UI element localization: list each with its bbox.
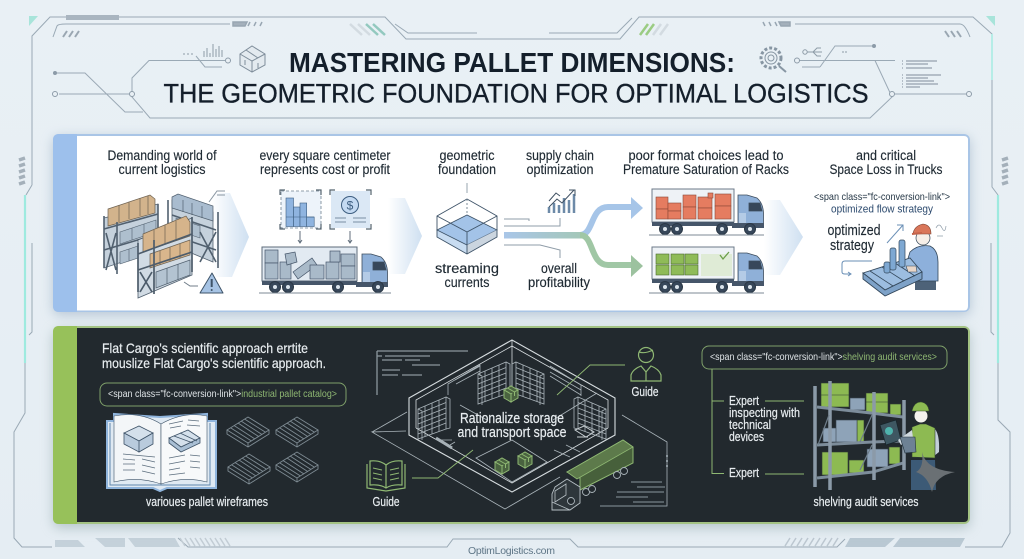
text: and critical space loss: Space Loss in Trucks: [830, 162, 943, 177]
text: expert: Expert: [729, 465, 759, 480]
link pill: catalog: <span class="fc-conversion-link">industrial pallet catalog>: [108, 388, 337, 400]
icon: nodes: [803, 48, 846, 56]
text: supply chain optimization: [526, 148, 594, 177]
text: expert inspecting: inspecting with: [729, 405, 800, 420]
icon: worker with pallet: [842, 224, 946, 296]
icon: rising trend chart: [549, 190, 575, 213]
text: rationalize storage: and transport space: [458, 425, 566, 441]
icon: truck with disordered cargo: [259, 247, 391, 293]
caption: pallet wireframes: varioues pallet wireframes: [146, 494, 268, 509]
icon: gear and magnifier: [761, 48, 786, 72]
icon: small bar chart: [183, 44, 222, 57]
text: rationalize storage: [458, 411, 566, 441]
text: conversion link: optimized flow strategy: [831, 204, 933, 216]
footer: site name: OptimLogistics.com: [468, 545, 555, 557]
text: poor format choices: poor format choices lead to: [628, 148, 784, 163]
icon: wire truck: [552, 440, 633, 510]
icon: text list: [902, 61, 941, 87]
text: expert inspecting: [729, 393, 800, 444]
sparkle watermark: [916, 452, 955, 492]
arrows to truck: [298, 231, 352, 243]
icon: parcel box: [240, 46, 265, 72]
text: optimized strategy: strategy: [830, 237, 874, 254]
text: streaming currents: currents: [444, 275, 490, 290]
text: supply chain optimization: optimization: [526, 162, 594, 177]
icon: pallet wireframes: [227, 417, 318, 484]
tree connector: [712, 369, 804, 474]
label: guide bottom: Guide: [372, 494, 400, 509]
text: poor format choices: [623, 148, 789, 177]
text: optimized strategy: optimized: [828, 222, 880, 239]
chevron arrow 1: [212, 193, 249, 277]
icon: dollar sheet: [330, 190, 371, 229]
title: [164, 47, 868, 108]
link pill: catalog: [100, 383, 346, 406]
icon: dashed bar chart: [280, 190, 321, 229]
text: expert inspecting: technical: [729, 417, 771, 432]
flow lines splitting to trucks: [504, 197, 643, 277]
icon: guide book: [367, 450, 473, 491]
text: rationalize storage: Rationalize storage: [460, 411, 564, 427]
text: conversion link: [814, 191, 950, 216]
icon: truck with green cargo: [649, 247, 764, 293]
title: MASTERING PALLET DIMENSIONS:: [289, 47, 735, 78]
text: conversion link: <span class="fc-conversion-link">: [814, 191, 950, 203]
text: demanding world: [108, 148, 217, 177]
icon: dollar sheet: $: [347, 198, 354, 212]
icon: shelving unit: [815, 381, 904, 490]
text: demanding world: current logistics: [118, 162, 206, 177]
panel: logistics challenge: [53, 134, 970, 315]
text: overall profitability: overall: [541, 261, 577, 276]
text: poor format choices: Premature Saturation of Racks: [623, 162, 789, 177]
icon: geometric cube with water: [437, 183, 497, 254]
text: geometric foundation: foundation: [438, 162, 496, 177]
chevron arrow 3: [764, 200, 803, 275]
icon: warning triangle: [200, 273, 223, 293]
title frame with circuit traces: [52, 44, 972, 118]
text: optimized strategy: [828, 222, 880, 254]
text: expert inspecting: devices: [729, 429, 764, 444]
text: overall profitability: [528, 261, 590, 290]
text: expert inspecting: Expert: [729, 393, 759, 408]
caption: shelving audit services: shelving audit services: [814, 494, 919, 509]
technical notes right: [600, 455, 667, 506]
icon: truck with red cargo: [649, 189, 764, 235]
label: guide top: Guide: [632, 384, 658, 399]
title: THE GEOMETRIC FOUNDATION FOR OPTIMAL LOGISTICS: [164, 78, 868, 108]
text: scientific approach: Flat Cargo's scientific approach errtite: [102, 340, 308, 356]
link pill: shelving audit: [702, 346, 947, 369]
text: streaming currents: [435, 261, 499, 290]
icon: warehouse racks: [104, 191, 225, 298]
text: streaming currents: streaming: [435, 261, 499, 276]
text: overall profitability: profitability: [528, 275, 590, 290]
text: demanding world: Demanding world of: [108, 148, 217, 163]
link pill: shelving audit: <span class="fc-conversion-link">shelving audit services>: [710, 351, 937, 363]
text: every square centimeter: [260, 148, 391, 177]
icon: inspector with tablet: [880, 402, 939, 490]
technical notes left: [377, 351, 468, 395]
text: supply chain optimization: supply chain: [526, 148, 594, 163]
text: scientific approach: [102, 340, 326, 371]
isometric warehouse: [372, 340, 667, 509]
text: geometric foundation: geometric: [440, 148, 495, 163]
text: scientific approach: mouslize Flat Cargo's scientific approach.: [102, 355, 326, 371]
text: and critical space loss: and critical: [856, 148, 916, 163]
text: geometric foundation: [438, 148, 496, 177]
chevron arrow 2: [388, 198, 422, 274]
icon: guide person: [557, 348, 661, 395]
text: and critical space loss: [830, 148, 943, 177]
icon: open book with diagrams: [107, 414, 216, 491]
text: every square centimeter: represents cost or profit: [260, 162, 390, 177]
panel: Flat Cargo approach: [53, 326, 970, 528]
text: every square centimeter: every square centimeter: [260, 148, 391, 163]
